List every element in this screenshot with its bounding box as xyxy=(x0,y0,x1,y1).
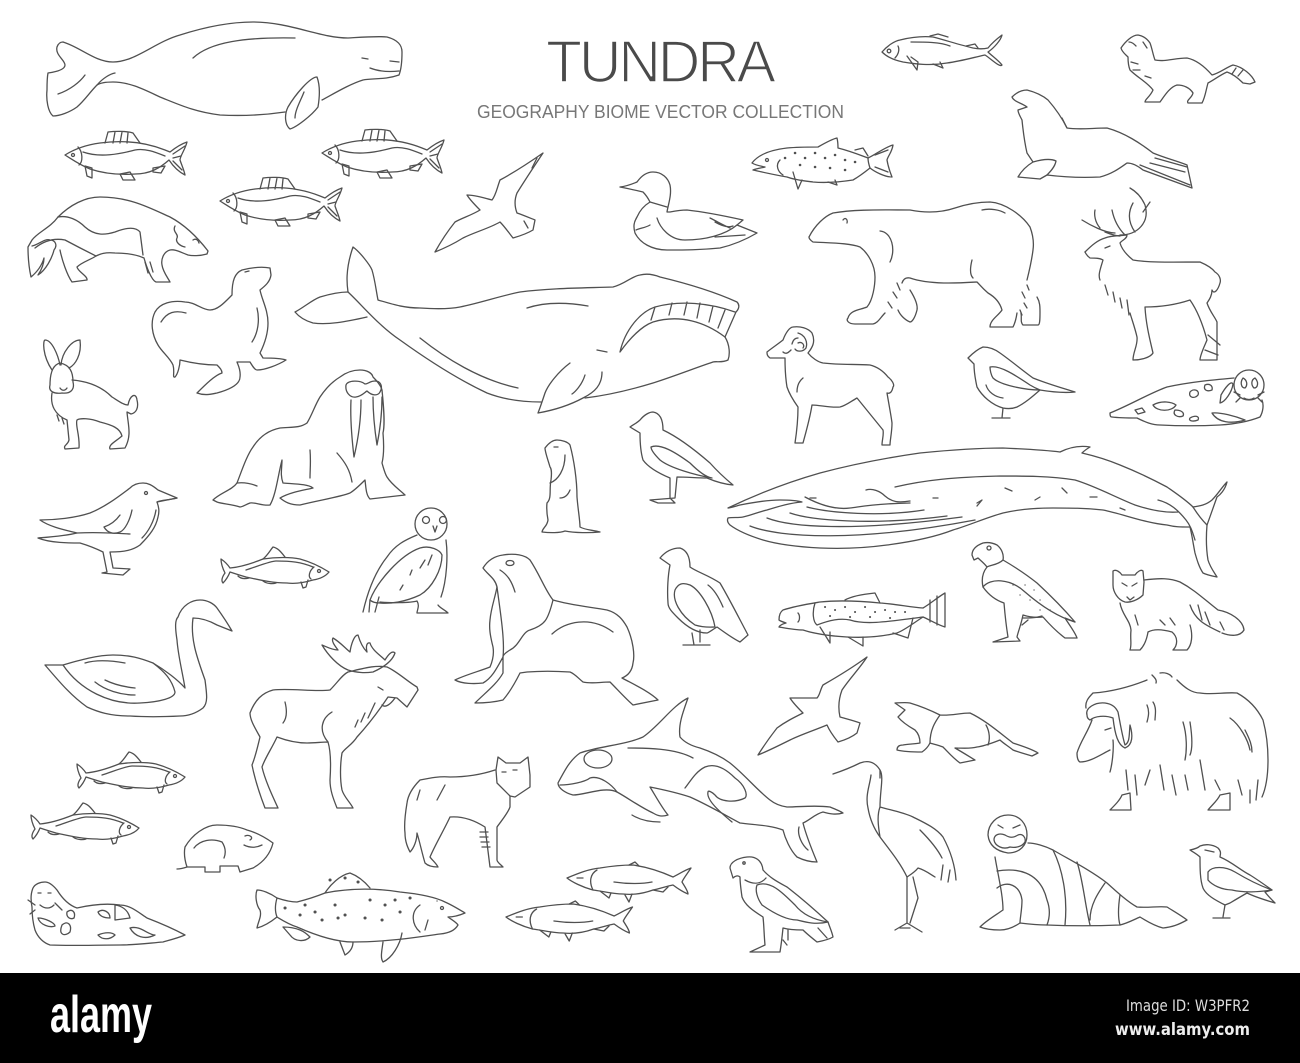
trout xyxy=(779,593,945,646)
flying bird xyxy=(758,657,867,755)
gull xyxy=(630,412,733,503)
salmon xyxy=(752,138,893,189)
ermine xyxy=(1121,35,1255,103)
website: www.alamy.com xyxy=(1115,1020,1250,1040)
small bird xyxy=(1190,845,1275,918)
subtitle: GEOGRAPHY BIOME VECTOR COLLECTION xyxy=(477,101,844,122)
flying bird xyxy=(435,153,543,252)
orca xyxy=(558,698,843,862)
duck xyxy=(620,172,757,250)
image id: Image ID: W3PFR2 xyxy=(1126,996,1250,1015)
bowhead whale xyxy=(295,247,739,413)
wolverine xyxy=(28,197,208,282)
reindeer xyxy=(1082,188,1220,360)
seal with patches xyxy=(1110,370,1264,426)
blue whale xyxy=(727,446,1227,577)
walrus xyxy=(213,370,405,507)
swimming seal xyxy=(895,703,1038,763)
falcon xyxy=(972,543,1077,642)
musk ox xyxy=(1077,673,1268,810)
swan xyxy=(45,600,232,717)
wolf xyxy=(405,757,530,867)
ptarmigan xyxy=(660,548,748,645)
ringed seal xyxy=(980,815,1187,930)
raven xyxy=(38,483,177,575)
lemming xyxy=(177,825,273,872)
ground squirrel xyxy=(542,440,600,533)
sea lion xyxy=(455,554,658,705)
arctic fox xyxy=(1113,570,1244,650)
perch fish xyxy=(322,129,444,178)
top fish xyxy=(882,34,1002,70)
perch fish xyxy=(220,177,342,226)
eagle xyxy=(730,857,833,952)
polar bear xyxy=(809,202,1040,327)
alamy logo: alamy xyxy=(50,986,152,1044)
title: TUNDRA xyxy=(546,29,777,95)
fish xyxy=(77,752,185,793)
perch fish xyxy=(65,131,187,180)
beluga whale xyxy=(47,22,402,129)
moose xyxy=(250,635,418,808)
snowy owl xyxy=(363,508,448,613)
crane xyxy=(833,762,956,932)
arctic hare xyxy=(44,340,138,449)
trout xyxy=(256,873,465,962)
sturgeon xyxy=(506,901,632,941)
footer band xyxy=(0,973,1300,1063)
fish xyxy=(31,803,139,844)
small fish xyxy=(221,547,329,588)
sparrow xyxy=(968,347,1075,418)
sea lion top xyxy=(1012,90,1192,188)
sturgeon xyxy=(567,862,691,902)
standing seal xyxy=(152,267,286,395)
spotted seal xyxy=(28,882,185,945)
bighorn sheep xyxy=(767,327,894,445)
